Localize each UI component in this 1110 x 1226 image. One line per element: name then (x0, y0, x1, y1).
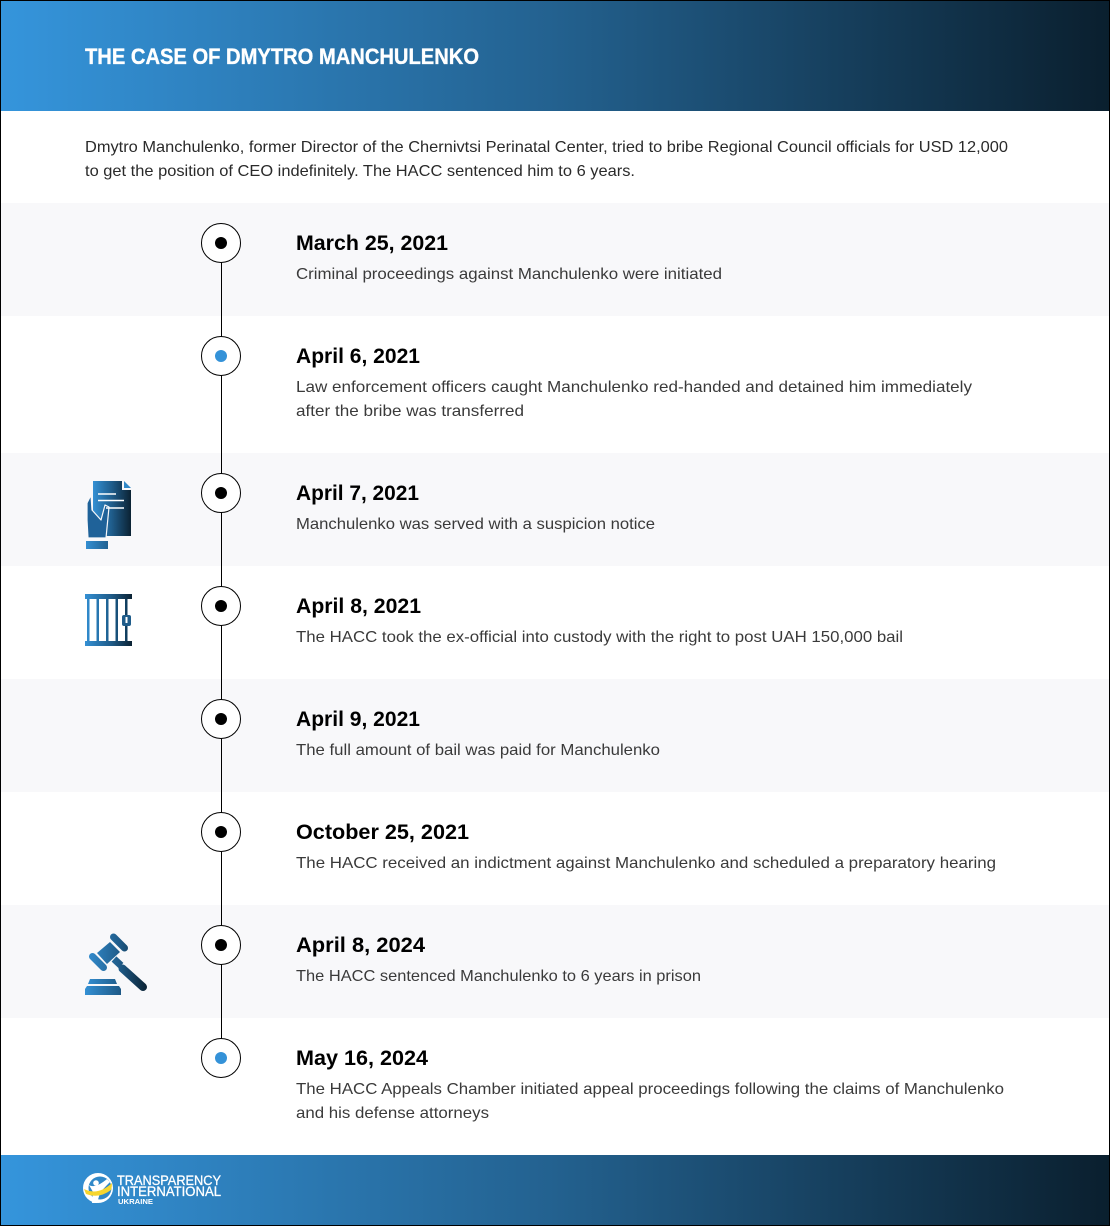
intro text: Dmytro Manchulenko, former Director of the Chernivtsi Perinatal Center, tried to bribe Regional Council officials for USD 12,000 (85, 139, 1008, 156)
event: March 25, 2021: Criminal proceedings against Manchulenko were initiated (296, 266, 722, 283)
event: April 7, 2021 (202, 474, 655, 533)
row backgrounds (0, 203, 1110, 1018)
intro text: to get the position of CEO indefinitely. The HACC sentenced him to 6 years. (85, 163, 635, 180)
event: April 8, 2021: The HACC took the ex-official into custody with the right to post UAH 150,000 bail (296, 629, 903, 646)
event: May 16, 2024: The HACC Appeals Chamber initiated appeal proceedings following the claims of Manchulenko (296, 1081, 1004, 1098)
event: April 8, 2024: April 8, 2024 (296, 934, 425, 957)
event: April 9, 2021: The full amount of bail was paid for Manchulenko (296, 742, 660, 759)
event: April 8, 2024 (202, 926, 701, 985)
footer logo: UKRAINE (118, 1199, 153, 1206)
event: April 6, 2021: April 6, 2021 (296, 345, 420, 368)
timeline line (220, 243, 222, 1058)
event: April 6, 2021: after the bribe was transferred (296, 403, 524, 420)
event: March 25, 2021 (202, 224, 722, 283)
icon: gavel (85, 937, 143, 995)
event: March 25, 2021: March 25, 2021 (296, 232, 448, 255)
icon: hand holding document (86, 481, 131, 549)
footer logo (83, 1173, 221, 1206)
event: May 16, 2024: and his defense attorneys (296, 1105, 489, 1122)
event: October 25, 2021: October 25, 2021 (296, 821, 469, 844)
event: April 9, 2021: April 9, 2021 (296, 708, 420, 731)
event: May 16, 2024 (202, 1038, 1004, 1122)
event: April 6, 2021: Law enforcement officers caught Manchulenko red-handed and detained him immediately (296, 379, 972, 396)
event: April 6, 2021 (202, 336, 972, 420)
footer logo: INTERNATIONAL (117, 1184, 221, 1199)
event: April 7, 2021: April 7, 2021 (296, 482, 419, 505)
intro text (85, 139, 1008, 180)
event: April 8, 2021: April 8, 2021 (296, 595, 421, 618)
event: April 8, 2024: The HACC sentenced Manchulenko to 6 years in prison (296, 968, 701, 985)
event: October 25, 2021 (202, 812, 996, 872)
event: May 16, 2024: May 16, 2024 (296, 1047, 428, 1070)
event: April 9, 2021 (202, 700, 660, 759)
event: October 25, 2021: The HACC received an indictment against Manchulenko and scheduled a preparatory hearing (296, 855, 996, 872)
icon: prison bars (85, 594, 132, 646)
header banner (0, 0, 1110, 111)
footer banner (0, 1155, 1110, 1226)
title: THE CASE OF DMYTRO MANCHULENKO (85, 44, 479, 69)
event: April 7, 2021: Manchulenko was served with a suspicion notice (296, 516, 655, 533)
footer logo: TRANSPARENCY (117, 1173, 221, 1188)
event: April 8, 2021 (202, 586, 903, 646)
